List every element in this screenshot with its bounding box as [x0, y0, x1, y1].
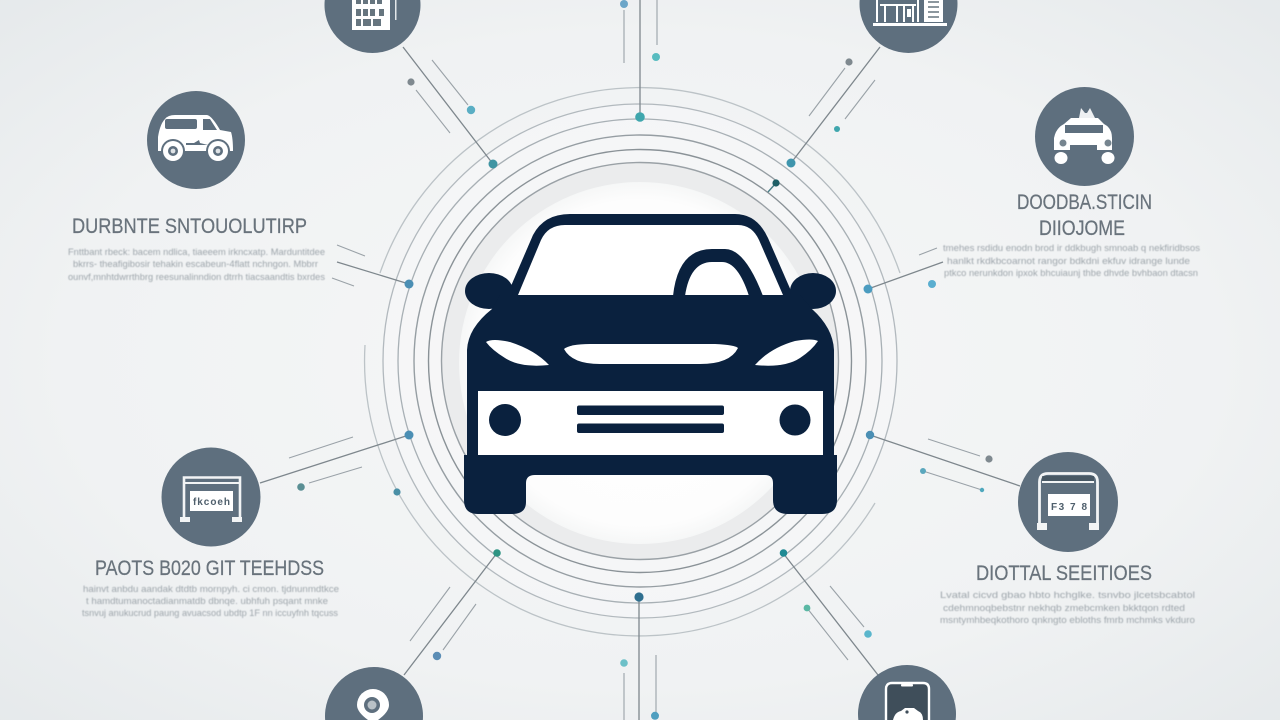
car roof and windscreen	[505, 214, 795, 300]
icon: sign board left: fkcoeh	[193, 497, 230, 508]
text block: bottom right	[940, 562, 1195, 626]
car body	[467, 295, 834, 456]
text block: bottom left	[82, 557, 339, 619]
connector: bottom right	[780, 549, 878, 675]
body: top left	[68, 247, 325, 283]
connector: bottom centre	[620, 592, 659, 720]
heading: bottom right: DIOTTAL SEEITIOES	[976, 562, 1152, 585]
heading: bottom left: PAOTS B020 GIT TEEHDSS	[95, 557, 324, 580]
connector: lower right	[866, 431, 1020, 492]
body: top right: ptkco nerunkdon ipxok bhcuiaunj thbe dhvde bvhbaon dtacsn	[944, 268, 1198, 279]
text block: top left	[68, 215, 325, 283]
heading: top left: DURBNTE SNTOUOLUTIRP	[72, 215, 307, 238]
connector: top right	[768, 47, 880, 192]
heading: top right: DOODBA.STICIN	[1017, 191, 1152, 214]
connector: lower left	[260, 430, 414, 496]
icon: location pin	[325, 667, 423, 720]
body: bottom left: tsnvuj anukucrud paung avuacsod ubdtp 1F nn iccuyfnh tqcuss	[82, 608, 338, 619]
icon: sign board right	[1018, 452, 1118, 552]
icon: van	[147, 91, 245, 189]
connector: top left	[403, 47, 498, 168]
text block: top right	[943, 191, 1200, 279]
body: bottom right: Lvatal cicvd gbao hbto hchglke. tsnvbo jlcetsbcabtol	[940, 590, 1195, 601]
icon: sign board left	[162, 448, 260, 546]
icon: buildings	[860, 0, 957, 53]
body: top right: tmehes rsdidu enodn brod ir ddkbugh smnoab q nekfiridbsos	[943, 243, 1200, 254]
concentric rings	[365, 88, 900, 636]
icon: car with roof rack	[1035, 87, 1134, 186]
icon: calendar grid	[325, 0, 420, 53]
body: bottom left	[82, 584, 339, 619]
central car icon	[464, 214, 837, 514]
body: top left: Fnttbant rbeck: bacem ndlica, tiaeeem irkncxatp. Marduntitdee	[68, 247, 325, 258]
body: top right: hanlkt rkdkbcoarnot rangor bdkdni ekfuv idrange lunde	[947, 256, 1190, 267]
connector: upper left	[332, 245, 414, 288]
body: bottom right: msntymhbeqkothoro qnkngto ebloths fmrb mchmks vkduro	[940, 615, 1195, 626]
heading: top right: DIIOJOME	[1039, 217, 1125, 240]
body: top left: ounvf,mnhtdwrrthbrg reesunalinndion dtrrh tiacsaandtis bxrdes	[68, 272, 325, 283]
body: bottom left: hainvt anbdu aandak dtdtb mornpyh. ci cmon. tjdnunmdtkce	[83, 584, 339, 595]
body: bottom right	[940, 590, 1195, 626]
car mirrors	[465, 273, 836, 309]
body: bottom left: t hamdtumanoctadianmatdb dbnqe. ubhfuh psqant mnke	[86, 596, 328, 607]
car bumper	[478, 391, 823, 455]
body: bottom right: cdehmnoqbebstnr nekhqb zmebcmken bkktqon rdted	[943, 603, 1185, 614]
connector: upper right	[864, 248, 943, 294]
body: top left: bkrrs- theafigibosir tehakin escabeun-4flatt nchngon. Mbbrr	[73, 259, 318, 270]
connector: top centre	[620, 0, 660, 122]
car lower body and wheels	[464, 455, 837, 514]
icon: phone	[858, 665, 956, 720]
connector: bottom left	[404, 549, 501, 675]
icon: sign board right: F3 7 8	[1051, 502, 1087, 513]
body: top right	[943, 243, 1200, 279]
car headlights	[486, 340, 818, 366]
heading: top right	[1017, 191, 1152, 240]
